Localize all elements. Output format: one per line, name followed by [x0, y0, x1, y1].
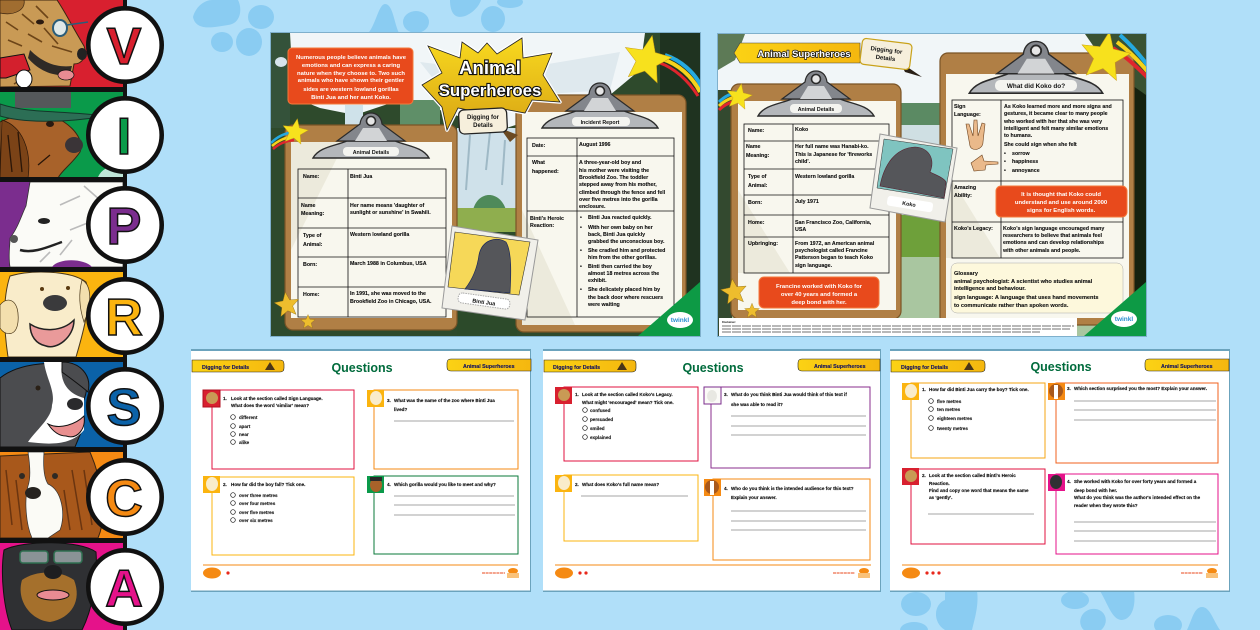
- header right tab: Animal Superheroes: [1161, 364, 1213, 370]
- Koko ability callout: understand and use around 2000: [1015, 200, 1108, 206]
- animal details table: Her full name was Hanabi-ko.: [795, 144, 869, 150]
- animal details table: Name:: [748, 128, 764, 134]
- incident report table: Binti's Heroic: [530, 216, 564, 222]
- Koko table: •: [1004, 151, 1006, 157]
- question 4: [704, 479, 870, 560]
- header ribbon: Animal Superheroes: [757, 49, 851, 60]
- twinkl corner: twinkl: [1115, 316, 1133, 323]
- photo: Koko gorilla: [870, 134, 957, 222]
- question 1: What might 'encouraged' mean? Tick one.: [582, 400, 674, 405]
- incident report table: grabbed the unconscious boy.: [588, 239, 665, 245]
- Koko table: As Koko learned more and more signs and: [1004, 104, 1112, 110]
- incident report table: August 1996: [579, 142, 611, 148]
- badge I: [88, 98, 162, 172]
- question 2: over four metres: [239, 501, 276, 506]
- question 4: Explain your answer.: [731, 495, 777, 500]
- incident report table: •: [580, 248, 582, 254]
- Francine callout: [759, 277, 879, 308]
- incident report table: climbed through the fence and fell: [579, 190, 666, 196]
- clipboard clip: [313, 113, 429, 158]
- glossary: sign language: A language that uses hand movements: [954, 295, 1098, 301]
- Digging for Details badge: [860, 38, 922, 77]
- animal details table: [298, 169, 446, 317]
- header left tab: [544, 360, 636, 372]
- question 2: over three metres: [239, 493, 278, 498]
- animal details table: Western lowland gorilla: [350, 232, 409, 238]
- animal details table: Born:: [748, 200, 762, 206]
- animal details table: From 1972, an American animal: [795, 241, 875, 247]
- twinkl corner: twinkl: [671, 317, 689, 324]
- title burst: Animal: [459, 57, 521, 78]
- question 3: [1048, 383, 1218, 463]
- Francine callout: over 40 years and formed a: [781, 292, 858, 298]
- question 2: [902, 468, 1045, 544]
- header right tab: Animal Superheroes: [814, 364, 866, 370]
- incident report table: Date:: [532, 143, 545, 149]
- question 3: 3.: [1067, 386, 1071, 391]
- star and rainbow left: [271, 116, 310, 149]
- badge S: S: [107, 379, 141, 437]
- incident report table: back, Binti Jua quickly: [588, 232, 645, 238]
- incident report table: enclosure.: [579, 204, 606, 210]
- question 2: over five metres: [239, 510, 275, 515]
- incident report table: the back door where rescuers: [588, 295, 663, 301]
- stars bottom left: [273, 290, 315, 328]
- Koko table: Koko's sign language encouraged many: [1003, 226, 1104, 232]
- header left tab: Digging for Details: [553, 365, 600, 371]
- Francine callout: Francine worked with Koko for: [776, 284, 863, 290]
- question 1: Look at the section called Sign Language.: [231, 396, 323, 401]
- question 4: [1048, 474, 1218, 554]
- glossary: to communicate rather than spoken words.: [954, 303, 1069, 309]
- clipboard clip: [969, 41, 1103, 93]
- header left tab: Digging for Details: [202, 365, 249, 371]
- band V with airedale dog: [0, 0, 123, 88]
- heading: Questions: [1030, 360, 1092, 374]
- incident report table: exhibit.: [588, 278, 607, 284]
- Koko table: emotions and can develop relationships: [1003, 240, 1104, 246]
- animal details table: Name: [746, 144, 760, 150]
- question 1: confused: [590, 408, 611, 413]
- question 1: 1.: [223, 396, 227, 401]
- animal details table: Binti Jua: [350, 174, 372, 180]
- icon: signing hands: [966, 120, 998, 171]
- glossary: [951, 263, 1123, 313]
- Digging for Details badge: Details: [473, 123, 493, 129]
- question 2: 2.: [922, 473, 926, 478]
- question 1: ten metres: [937, 407, 961, 412]
- incident report table: •: [580, 287, 582, 293]
- question 3: [367, 390, 518, 469]
- animal details table: Name: [301, 203, 315, 209]
- question 4: [367, 476, 518, 554]
- header left tab: Digging for Details: [901, 365, 948, 371]
- panel: questions sheet 1: [191, 349, 531, 592]
- question 2: Reaction.: [929, 481, 950, 486]
- animal details table: Brookfield Zoo in Chicago, USA.: [350, 299, 432, 305]
- band I with hound dog: [0, 92, 123, 178]
- title burst: Superheroes: [439, 81, 541, 100]
- question 3: 3.: [387, 398, 391, 403]
- question 1: twenty metres: [937, 426, 968, 431]
- question 4: reader when they wrote this?: [1074, 503, 1138, 508]
- question 2: 2.: [575, 482, 579, 487]
- incident report table: happened:: [532, 169, 559, 175]
- star and rainbow top right: [624, 35, 700, 97]
- Koko table: Sign: [954, 104, 965, 110]
- question 3: lived?: [394, 407, 407, 412]
- animal details table: Animal:: [303, 242, 323, 248]
- left clipboard: Animal Details: [353, 150, 389, 156]
- right clipboard: What did Koko do?: [1007, 83, 1065, 90]
- incident report table: him from the other gorillas.: [588, 255, 657, 261]
- intro callout: Numerous people believe animals have: [296, 55, 407, 61]
- animal details table: sunlight or sunshine' in Swahili.: [350, 210, 431, 216]
- incident report table: A three-year-old boy and: [579, 160, 641, 166]
- question 4: What do you think was the author's intended effect on the: [1074, 495, 1201, 500]
- animal details table: San Francisco Zoo, California,: [795, 220, 872, 226]
- question 4: 4.: [387, 482, 391, 487]
- question 1: persuaded: [590, 417, 613, 422]
- incident report table: over five metres into the gorilla: [579, 197, 658, 203]
- Koko table: •: [1004, 168, 1006, 174]
- band C with spaniel dog: [0, 452, 123, 538]
- Koko table: She could sign when she felt: [1004, 142, 1077, 148]
- animal details table: Name:: [303, 174, 319, 180]
- header right tab: [447, 359, 531, 371]
- glossary: intelligence and behaviour.: [954, 286, 1026, 292]
- animal details table: Upbringing:: [748, 241, 778, 247]
- animal details table: Meaning:: [301, 211, 324, 217]
- animal details table: Western lowland gorilla: [795, 174, 854, 180]
- Koko table: intelligent and felt many similar emotions: [1004, 126, 1108, 132]
- intro callout: animals who have shown their gentler: [298, 78, 405, 84]
- panel: Binti Jua page: [270, 31, 702, 337]
- Koko table: Ability:: [954, 193, 972, 199]
- question 1: explained: [590, 435, 611, 440]
- incident report table: Reaction:: [530, 223, 554, 229]
- incident report table: Binti then carried the boy: [588, 264, 652, 270]
- panel: questions sheet 2: [543, 349, 881, 592]
- question 2: as 'gently'.: [929, 495, 952, 500]
- panel: Koko page: [717, 27, 1148, 337]
- animal details table: March 1988 in Columbus, USA: [350, 261, 427, 267]
- animal details table: Born:: [303, 262, 317, 268]
- intro callout: emotions and can express a caring: [302, 63, 401, 69]
- Digging for Details badge: Details: [875, 55, 896, 63]
- Digging for Details badge: Digging for: [467, 115, 500, 121]
- badge P: P: [107, 198, 141, 256]
- animal details table: Koko: [795, 127, 809, 133]
- question 3: she was able to read it?: [731, 402, 783, 407]
- badge C: C: [105, 470, 143, 528]
- star and rainbow top right: [1082, 34, 1146, 81]
- question 3: What was the name of the zoo where Binti Jua: [394, 398, 495, 403]
- question 2: [203, 476, 354, 555]
- question 3: [704, 387, 870, 468]
- animal details table: Meaning:: [746, 153, 769, 159]
- animal details table: This is Japanese for 'fireworks: [795, 152, 872, 158]
- header right tab: [798, 359, 880, 371]
- intro callout: Binti Jua and her aunt Koko.: [311, 95, 391, 101]
- incident report table: What: [532, 160, 545, 166]
- Koko table: Language:: [954, 112, 981, 118]
- animal details table: USA: [795, 227, 806, 233]
- question 1: apart: [239, 424, 251, 429]
- Koko table: to humans.: [1004, 133, 1033, 139]
- right clipboard: Incident Report: [581, 120, 620, 126]
- photo: Koko gorilla: Koko: [902, 201, 917, 209]
- badge I: I: [117, 108, 131, 166]
- incident report table: almost 18 metres across the: [588, 271, 659, 277]
- glossary: animal psychologist: A scientist who studies animal: [954, 279, 1093, 285]
- question 1: near: [239, 432, 249, 437]
- question 2: How far did the boy fall? Tick one.: [231, 482, 305, 487]
- incident report table: Binti Jua reacted quickly.: [588, 215, 652, 221]
- Koko table: with other animals and people.: [1002, 248, 1081, 254]
- badge C: [88, 460, 162, 534]
- question 4: 4.: [724, 486, 728, 491]
- animal details table: Patterson began to teach Koko: [795, 255, 874, 261]
- incident report table: With her own baby on her: [588, 225, 653, 231]
- question 2: Look at the section called Binti's Heroic: [929, 473, 1016, 478]
- band S with collie dog: [0, 362, 123, 447]
- intro callout: nature when they choose to. Two such: [297, 71, 405, 77]
- incident report table: •: [580, 225, 582, 231]
- badge R: R: [105, 289, 143, 347]
- twinkl corner: [1084, 282, 1146, 336]
- sheet footer: [902, 565, 1218, 578]
- photo: Binti Jua gorilla: Binti Jua: [472, 298, 497, 308]
- band P with white dog: [0, 182, 123, 267]
- question 1: different: [239, 415, 258, 420]
- animal details table: Type of: [303, 233, 322, 239]
- stars bottom left: [719, 277, 759, 317]
- Koko table: gestures, it became clear to many people: [1004, 111, 1108, 117]
- panel: questions sheet 3: [890, 349, 1230, 592]
- question 1: smiled: [590, 426, 605, 431]
- question 4: Which gorilla would you like to meet and why?: [394, 482, 496, 487]
- Francine callout: deep bond with her.: [791, 300, 847, 306]
- question 1: five metres: [937, 399, 962, 404]
- header left tab: [192, 360, 284, 372]
- incident report table: •: [580, 264, 582, 270]
- glossary: Glossary: [954, 271, 979, 277]
- Koko table: Amazing: [954, 185, 976, 191]
- star and rainbow left: [719, 81, 754, 110]
- incident report table: were waiting: [587, 302, 620, 308]
- question 2: 2.: [223, 482, 227, 487]
- Koko table: sorrow: [1012, 151, 1031, 157]
- question 3: 3.: [724, 392, 728, 397]
- sidebar: VIPRSCA dogs: [0, 0, 162, 630]
- question 1: eighteen metres: [937, 416, 973, 421]
- incident report table: •: [580, 215, 582, 221]
- clipboard clip: [758, 71, 874, 116]
- question 1: What does the word 'similar' mean?: [231, 403, 309, 408]
- question 2: What does Koko's full name mean?: [582, 482, 659, 487]
- Koko table: happiness: [1012, 159, 1038, 165]
- animal details table: In 1991, she was moved to the: [350, 291, 426, 297]
- animal details table: [744, 124, 889, 273]
- animal details table: Home:: [303, 292, 320, 298]
- Koko table: who worked with her that she was very: [1003, 119, 1102, 125]
- question 1: How far did Binti Jua carry the boy? Tick one.: [929, 387, 1029, 392]
- right clipboard: [516, 83, 686, 332]
- sheet footer: [555, 565, 871, 578]
- badge P: [88, 188, 162, 262]
- badge S: [88, 369, 162, 443]
- question 4: 4.: [1067, 479, 1071, 484]
- sheet footer: [203, 565, 519, 578]
- twinkl corner: [638, 282, 700, 336]
- photo: Binti Jua gorilla: [442, 226, 538, 320]
- disclaimer footer: [719, 318, 1077, 336]
- Koko ability callout: signs for English words.: [1027, 208, 1096, 214]
- left clipboard: [731, 71, 901, 319]
- incident report table: She delicately placed him by: [588, 287, 660, 293]
- Koko table: researchers to believe that animals feel: [1003, 233, 1102, 239]
- incident report table: She cradled him and protected: [588, 248, 665, 254]
- question 4: deep bond with her.: [1074, 488, 1117, 493]
- question 1: 1.: [922, 387, 926, 392]
- animal details table: Type of: [748, 174, 767, 180]
- animal details table: Home:: [748, 220, 765, 226]
- question 2: Find and copy one word that means the same: [929, 488, 1029, 493]
- header right tab: Animal Superheroes: [463, 364, 515, 370]
- Koko ability callout: It is thought that Koko could: [1021, 192, 1101, 198]
- incident report table: [527, 138, 674, 317]
- question 4: Who do you think is the intended audience for this text?: [731, 486, 854, 491]
- clipboard clip: [542, 83, 658, 128]
- Digging for Details badge: [458, 108, 518, 142]
- question 4: She worked with Koko for over forty years and formed a: [1074, 479, 1197, 484]
- heading: Questions: [682, 361, 744, 375]
- header ribbon: [734, 43, 860, 63]
- incident report table: his mother were visiting the: [579, 168, 649, 174]
- header right tab: [1145, 359, 1229, 371]
- badge V: [88, 8, 162, 82]
- heading: Questions: [331, 361, 393, 375]
- disclaimer footer: Disclaimer:: [722, 320, 736, 324]
- badge A: [88, 550, 162, 624]
- band R with golden dog: [0, 272, 123, 357]
- badge R: [88, 279, 162, 353]
- animal details table: sign language.: [795, 263, 833, 269]
- animal details table: July 1971: [795, 199, 819, 205]
- question 2: over six metres: [239, 518, 273, 523]
- intro callout: sides are western lowland gorillas: [303, 87, 400, 93]
- question 3: Which section surprised you the most? Explain your answer.: [1074, 386, 1207, 391]
- right clipboard: [940, 41, 1134, 325]
- question 1: alike: [239, 440, 250, 445]
- animal details table: child'.: [795, 159, 811, 165]
- question 1: [555, 387, 698, 461]
- Koko ability callout: [996, 186, 1127, 217]
- animal details table: Her name means 'daughter of: [350, 203, 424, 209]
- Digging for Details badge: Digging for: [870, 46, 903, 56]
- question 3: What do you think Binti Jua would think of this text if: [731, 392, 847, 397]
- divider rails: [0, 0, 127, 630]
- Koko table: annoyance: [1012, 168, 1040, 174]
- Koko table: •: [1004, 159, 1006, 165]
- question 1: Look at the section called Koko's Legacy.: [582, 392, 673, 397]
- band A with rottweiler dog: [0, 543, 123, 630]
- animal details table: Animal:: [748, 183, 768, 189]
- incident report table: stepped away from his mother,: [579, 182, 657, 188]
- Koko table: [952, 100, 1123, 258]
- animal details table: psychologist called Francine: [795, 248, 868, 254]
- incident report table: Brookfield Zoo. The toddler: [579, 175, 648, 181]
- badge A: A: [105, 560, 143, 618]
- question 2: [555, 475, 698, 541]
- intro callout: [288, 48, 413, 104]
- left clipboard: Animal Details: [798, 107, 834, 113]
- Koko table: Koko's Legacy:: [954, 226, 993, 232]
- question 1: 1.: [575, 392, 579, 397]
- title burst: [422, 38, 560, 130]
- question 1: [902, 383, 1045, 458]
- header left tab: [891, 360, 985, 372]
- question 1: [203, 390, 354, 469]
- badge V: V: [107, 18, 142, 76]
- left clipboard: [285, 113, 457, 330]
